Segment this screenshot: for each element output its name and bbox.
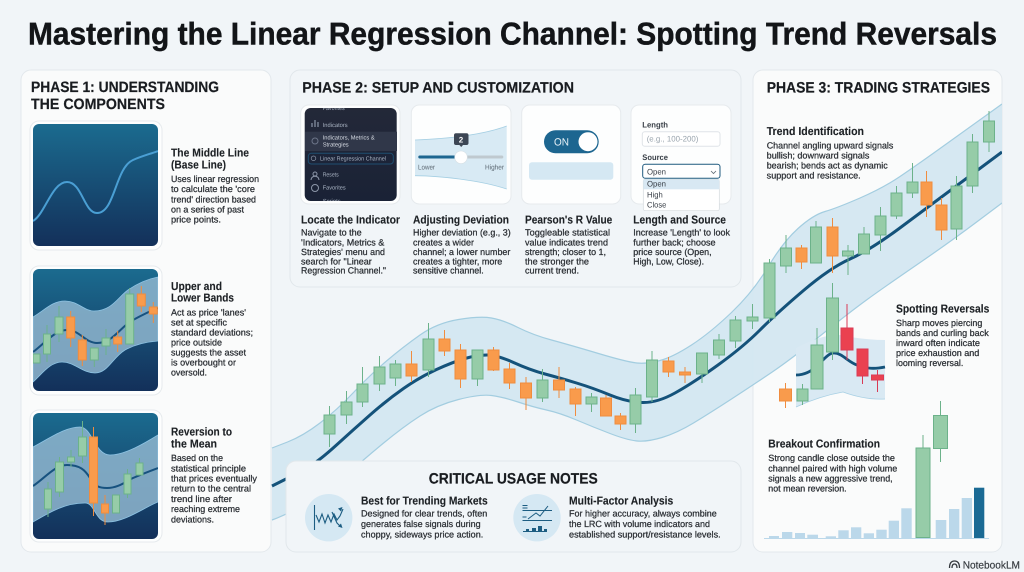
text: trend identification: Channel angling upward signals	[767, 140, 894, 150]
heading: phase 1	[31, 79, 219, 113]
text: the middle line: price points.	[171, 214, 221, 224]
text: reversion to the mean: the Mean	[171, 439, 217, 451]
text: the middle line: on a series of past	[171, 204, 244, 214]
text: reversion to the mean: statistical principle	[171, 463, 246, 473]
card: length and source form: (e.g., 100-200)	[647, 135, 699, 144]
text: spotting reversals: bands and curling back	[896, 328, 989, 338]
card: deviation slider	[411, 105, 511, 204]
text: multi-factor analysis: For higher accuracy, always combine	[569, 509, 717, 519]
card: length and source form: Open	[647, 167, 666, 176]
text: spotting reversals	[896, 303, 989, 368]
heading: phase 2: PHASE 2: SETUP AND CUSTOMIZATION	[302, 80, 574, 97]
text: adjusting deviation: Adjusting Deviation	[413, 214, 509, 226]
text: trend identification: bullish; downward signals	[767, 150, 870, 160]
card: length and source form: Source	[642, 153, 669, 162]
text: the middle line: The Middle Line	[171, 148, 249, 160]
card: indicator menu: Favorites	[323, 185, 346, 192]
text: pearson's R value: value indicates trend	[525, 237, 608, 247]
text: upper and lower bands	[171, 281, 253, 378]
text: length and source: price source (Open,	[633, 247, 712, 257]
chart: breakout volume bars and candles	[764, 401, 989, 538]
heading: critical usage notes: CRITICAL USAGE NOTES	[429, 470, 598, 487]
candlesticks	[324, 111, 994, 447]
text: reversion to the mean: Based on the	[171, 453, 223, 463]
text: best for trending markets	[361, 495, 488, 539]
text: pearson's R value	[525, 214, 612, 276]
text: length and source	[633, 214, 730, 266]
text: locate the indicator: search for "Linear	[301, 256, 372, 266]
text: locate the indicator: Strategies' menu and	[301, 247, 385, 257]
thumbnail: reversion to the mean	[30, 410, 162, 542]
text: pearson's R value: Toggleable statistical	[525, 228, 610, 238]
text: adjusting deviation	[413, 214, 511, 276]
text: the middle line: (Base Line)	[171, 159, 226, 171]
text: pearson's R value: Pearson's R Value	[525, 214, 612, 226]
text: spotting reversals: price exhaustion and	[896, 348, 979, 358]
text: pearson's R value: strength; closer to 1,	[525, 247, 606, 257]
text: upper and lower bands: Act as price 'lanes'	[171, 307, 246, 317]
text: breakout confirmation: Breakout Confirmation	[768, 438, 880, 450]
channel lower edge	[272, 203, 1002, 520]
card: length and source form: Close	[647, 201, 667, 210]
text: reversion to the mean: deviations.	[171, 514, 214, 524]
card: indicator menu: Strategies	[323, 141, 349, 148]
text: trend identification: bearish; bends act as dynamic	[767, 160, 888, 170]
text: locate the indicator: 'Indicators, Metrics &	[301, 237, 384, 247]
card: indicator menu: Favorites	[323, 105, 345, 112]
text: adjusting deviation: channel; a lower number	[413, 247, 510, 257]
text: the middle line: trend' direction based	[171, 194, 256, 204]
text: spotting reversals: Spotting Reversals	[896, 303, 989, 315]
text: adjusting deviation: creates a tighter, more	[413, 256, 502, 266]
card: length and source form: Open	[647, 180, 666, 189]
panel: phase 3 trading strategies	[753, 70, 1002, 552]
text: pearson's R value: the stronger the	[525, 256, 589, 266]
card: deviation slider: 2	[459, 136, 464, 144]
text: breakout confirmation: signals a new aggressive trend,	[768, 474, 893, 484]
card: deviation slider: Higher	[485, 163, 505, 171]
text: upper and lower bands: Upper and	[171, 281, 222, 293]
channel upper edge	[272, 104, 1002, 448]
card: deviation slider: Lower	[418, 164, 436, 171]
text: adjusting deviation: Higher deviation (e.g., 3)	[413, 228, 511, 238]
text: length and source: Length and Source	[633, 214, 726, 226]
card: indicator menu: Indicators, Metrics &	[323, 135, 375, 142]
heading: phase 3: PHASE 3: TRADING STRATEGIES	[767, 80, 990, 97]
text: reversion to the mean: that prices eventually	[171, 474, 258, 484]
heading: phase 1: THE COMPONENTS	[31, 96, 165, 113]
card: indicator menu: Resets	[323, 172, 339, 179]
text: reversion to the mean: reaching extreme	[171, 504, 240, 514]
text: breakout confirmation	[768, 438, 897, 494]
text: reversion to the mean: return to the central	[171, 484, 251, 494]
text: upper and lower bands: oversold.	[171, 368, 207, 378]
text: locate the indicator: Locate the Indicator	[301, 214, 400, 226]
channel band	[272, 104, 1002, 520]
text: multi-factor analysis: the LRC with volume indicators and	[569, 519, 710, 529]
regression center line	[272, 152, 1002, 486]
icon: choppy trend line	[305, 494, 352, 541]
text: multi-factor analysis: Multi-Factor Analysis	[569, 495, 673, 507]
text: upper and lower bands: set at specific	[171, 317, 228, 327]
text: the middle line	[171, 148, 259, 224]
text: upper and lower bands: suggests the asset	[171, 348, 246, 358]
card: length and source form: High	[647, 191, 663, 200]
text: locate the indicator: Navigate to the	[301, 228, 362, 238]
text: locate the indicator	[301, 214, 400, 276]
text: breakout confirmation: not mean reversion.	[768, 484, 847, 494]
icon: multi-factor analysis	[513, 494, 561, 541]
text: upper and lower bands: standard deviations;	[171, 327, 253, 337]
card: pearson's R toggle	[522, 105, 621, 204]
title: Mastering the Linear Regression Channel: Spotting Trend Reversals	[28, 15, 997, 51]
text: adjusting deviation: sensitive channel.	[413, 266, 484, 276]
text: spotting reversals: inward often indicate	[896, 338, 980, 348]
text: best for trending markets: Designed for clear trends, often	[361, 509, 487, 519]
text: adjusting deviation: creates a wider	[413, 237, 474, 247]
card: indicator menu: Linear Regression Channel	[320, 156, 386, 163]
text: spotting reversals: Sharp moves piercing	[896, 318, 982, 328]
thumbnail: middle line	[30, 121, 162, 250]
card: indicator menu	[301, 105, 400, 205]
card: length and source form: Length	[642, 120, 668, 129]
text: best for trending markets: Best for Trending Markets	[361, 495, 488, 507]
text: trend identification: support and resistance.	[767, 170, 861, 180]
text: trend identification	[767, 126, 894, 180]
text: the middle line: to calculate the 'core	[171, 184, 255, 194]
panel background: phase 3	[753, 70, 1002, 552]
card: length and source form	[631, 105, 731, 211]
text: upper and lower bands: is overbought or	[171, 358, 236, 368]
text: reversion to the mean	[171, 427, 258, 524]
text: multi-factor analysis: established support/resistance levels.	[569, 529, 721, 539]
text: spotting reversals: looming reversal.	[896, 358, 963, 368]
chart: reversal inset	[780, 283, 885, 408]
heading: phase 1: PHASE 1: UNDERSTANDING	[31, 79, 219, 96]
text: best for trending markets: generates false signals during	[361, 519, 481, 529]
text: trend identification: Trend Identification	[767, 126, 864, 138]
text: locate the indicator: Regression Channel."	[301, 266, 386, 276]
text: reversion to the mean: Reversion to	[171, 427, 232, 439]
text: upper and lower bands: price outside	[171, 337, 222, 347]
text: breakout confirmation: channel paired with high volume	[768, 463, 897, 473]
text: length and source: High, Low, Close).	[633, 256, 704, 266]
text: length and source: Increase 'Length' to look	[633, 228, 730, 238]
text: upper and lower bands: Lower Bands	[171, 293, 234, 305]
logo: NotebookLM: NotebookLM	[963, 559, 1020, 571]
card: pearson's R toggle: ON	[554, 137, 569, 149]
text: multi-factor analysis	[569, 495, 721, 539]
main regression channel chart	[272, 104, 1002, 520]
panel: phase 2 setup and customization	[290, 70, 741, 287]
thumbnail: upper and lower bands	[30, 266, 162, 395]
card: indicator menu: Indicators	[323, 122, 348, 129]
card: indicator menu: Scripts	[323, 198, 341, 205]
text: length and source: further back; choose	[633, 237, 716, 247]
panel: phase 1 components	[21, 70, 271, 552]
text: reversion to the mean: trend line after	[171, 494, 232, 504]
text: pearson's R value: current trend.	[525, 266, 579, 276]
text: the middle line: Uses linear regression	[171, 174, 259, 184]
panel: critical usage notes	[286, 461, 741, 552]
text: breakout confirmation: Strong candle close outside the	[768, 453, 895, 463]
text: best for trending markets: choppy, sideways price action.	[361, 529, 483, 539]
